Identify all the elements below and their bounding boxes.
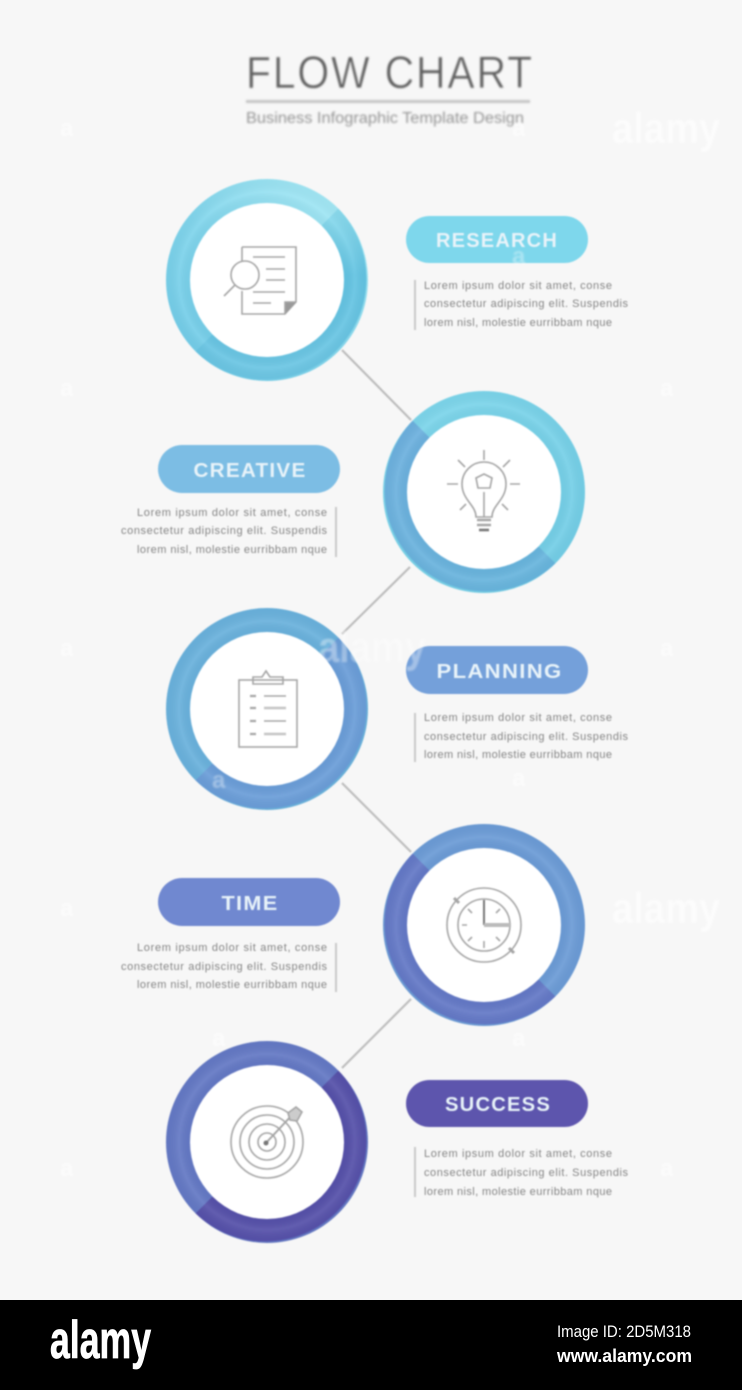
text: time description [121, 942, 337, 992]
watermarks: a [212, 767, 226, 794]
text: research description [414, 280, 628, 330]
connector lines [342, 350, 411, 1068]
footer bar [0, 1300, 742, 1390]
step 2: creative [121, 391, 585, 593]
watermarks: a [60, 895, 74, 922]
footer image id: Image ID: 2D5M318 [557, 1322, 691, 1341]
pill: planning: PLANNING [436, 661, 562, 683]
text: success description [414, 1147, 628, 1198]
ring 3 [166, 608, 368, 810]
watermarks: a [512, 765, 526, 792]
text: research description: consectetur adipiscing elit. Suspendis [424, 298, 628, 310]
text: planning description [414, 712, 628, 762]
watermarks: a [512, 243, 526, 270]
text: success description: lorem nisl, molestie eurribbam nque [424, 1186, 612, 1198]
pill: creative: CREATIVE [194, 460, 306, 482]
text: creative description: lorem nisl, molestie eurribbam nque [137, 544, 327, 556]
step 5: success [166, 1041, 628, 1243]
text: creative description [121, 507, 337, 557]
watermarks: a [60, 115, 74, 142]
watermarks: a [512, 1025, 526, 1052]
watermarks: a [60, 375, 74, 402]
watermarks: a [60, 635, 74, 662]
text: time description: lorem nisl, molestie eurribbam nque [137, 979, 327, 991]
watermarks: a [660, 1155, 674, 1182]
text: success description: Lorem ipsum dolor sit amet, conse [424, 1148, 612, 1160]
watermarks: a [660, 635, 674, 662]
pill: time: TIME [222, 893, 278, 915]
text: creative description: consectetur adipiscing elit. Suspendis [121, 525, 328, 537]
pill: success: SUCCESS [445, 1094, 551, 1116]
ring 1 [166, 179, 368, 381]
text: planning description: lorem nisl, molestie eurribbam nque [424, 749, 612, 761]
pill: planning [406, 646, 588, 694]
pill: time [158, 878, 340, 926]
watermarks: alamy [318, 623, 426, 672]
pill: research [406, 216, 588, 263]
watermarks [60, 104, 720, 1182]
watermarks: a [660, 375, 674, 402]
icon: clipboard checklist [239, 671, 297, 747]
ring 5 [166, 1041, 368, 1243]
text: creative description: Lorem ipsum dolor sit amet, conse [137, 507, 327, 519]
ring 4 [383, 824, 585, 1026]
text: research description: Lorem ipsum dolor sit amet, conse [424, 280, 612, 292]
icon: document and magnifier [224, 247, 296, 314]
watermarks: a [212, 1025, 226, 1052]
icon: light bulb [447, 450, 520, 530]
text: research description: lorem nisl, molestie eurribbam nque [424, 317, 612, 329]
step 3: planning [166, 608, 628, 810]
watermarks: a [512, 115, 526, 142]
text: time description: Lorem ipsum dolor sit amet, conse [137, 942, 327, 954]
text: planning description: consectetur adipiscing elit. Suspendis [424, 731, 628, 743]
step 1: research [166, 179, 628, 381]
step 4: time [121, 824, 585, 1026]
watermarks: alamy [612, 884, 720, 933]
text: planning description: Lorem ipsum dolor sit amet, conse [424, 712, 612, 724]
pill: creative [158, 445, 340, 493]
footer logo: alamy [50, 1311, 151, 1370]
title: FLOW CHART [246, 47, 534, 98]
watermarks: alamy [612, 104, 720, 153]
text: time description: consectetur adipiscing elit. Suspendis [121, 961, 328, 973]
pill: success [406, 1080, 588, 1127]
pill: research: RESEARCH [436, 230, 558, 252]
footer url: www.alamy.com [556, 1346, 692, 1366]
watermarks: a [60, 1155, 74, 1182]
subtitle: Business Infographic Template Design [246, 110, 524, 127]
icon: clock [447, 888, 521, 962]
ring 2 [383, 391, 585, 593]
icon: target with arrow [231, 1106, 303, 1178]
text: success description: consectetur adipiscing elit. Suspendis [424, 1167, 628, 1179]
